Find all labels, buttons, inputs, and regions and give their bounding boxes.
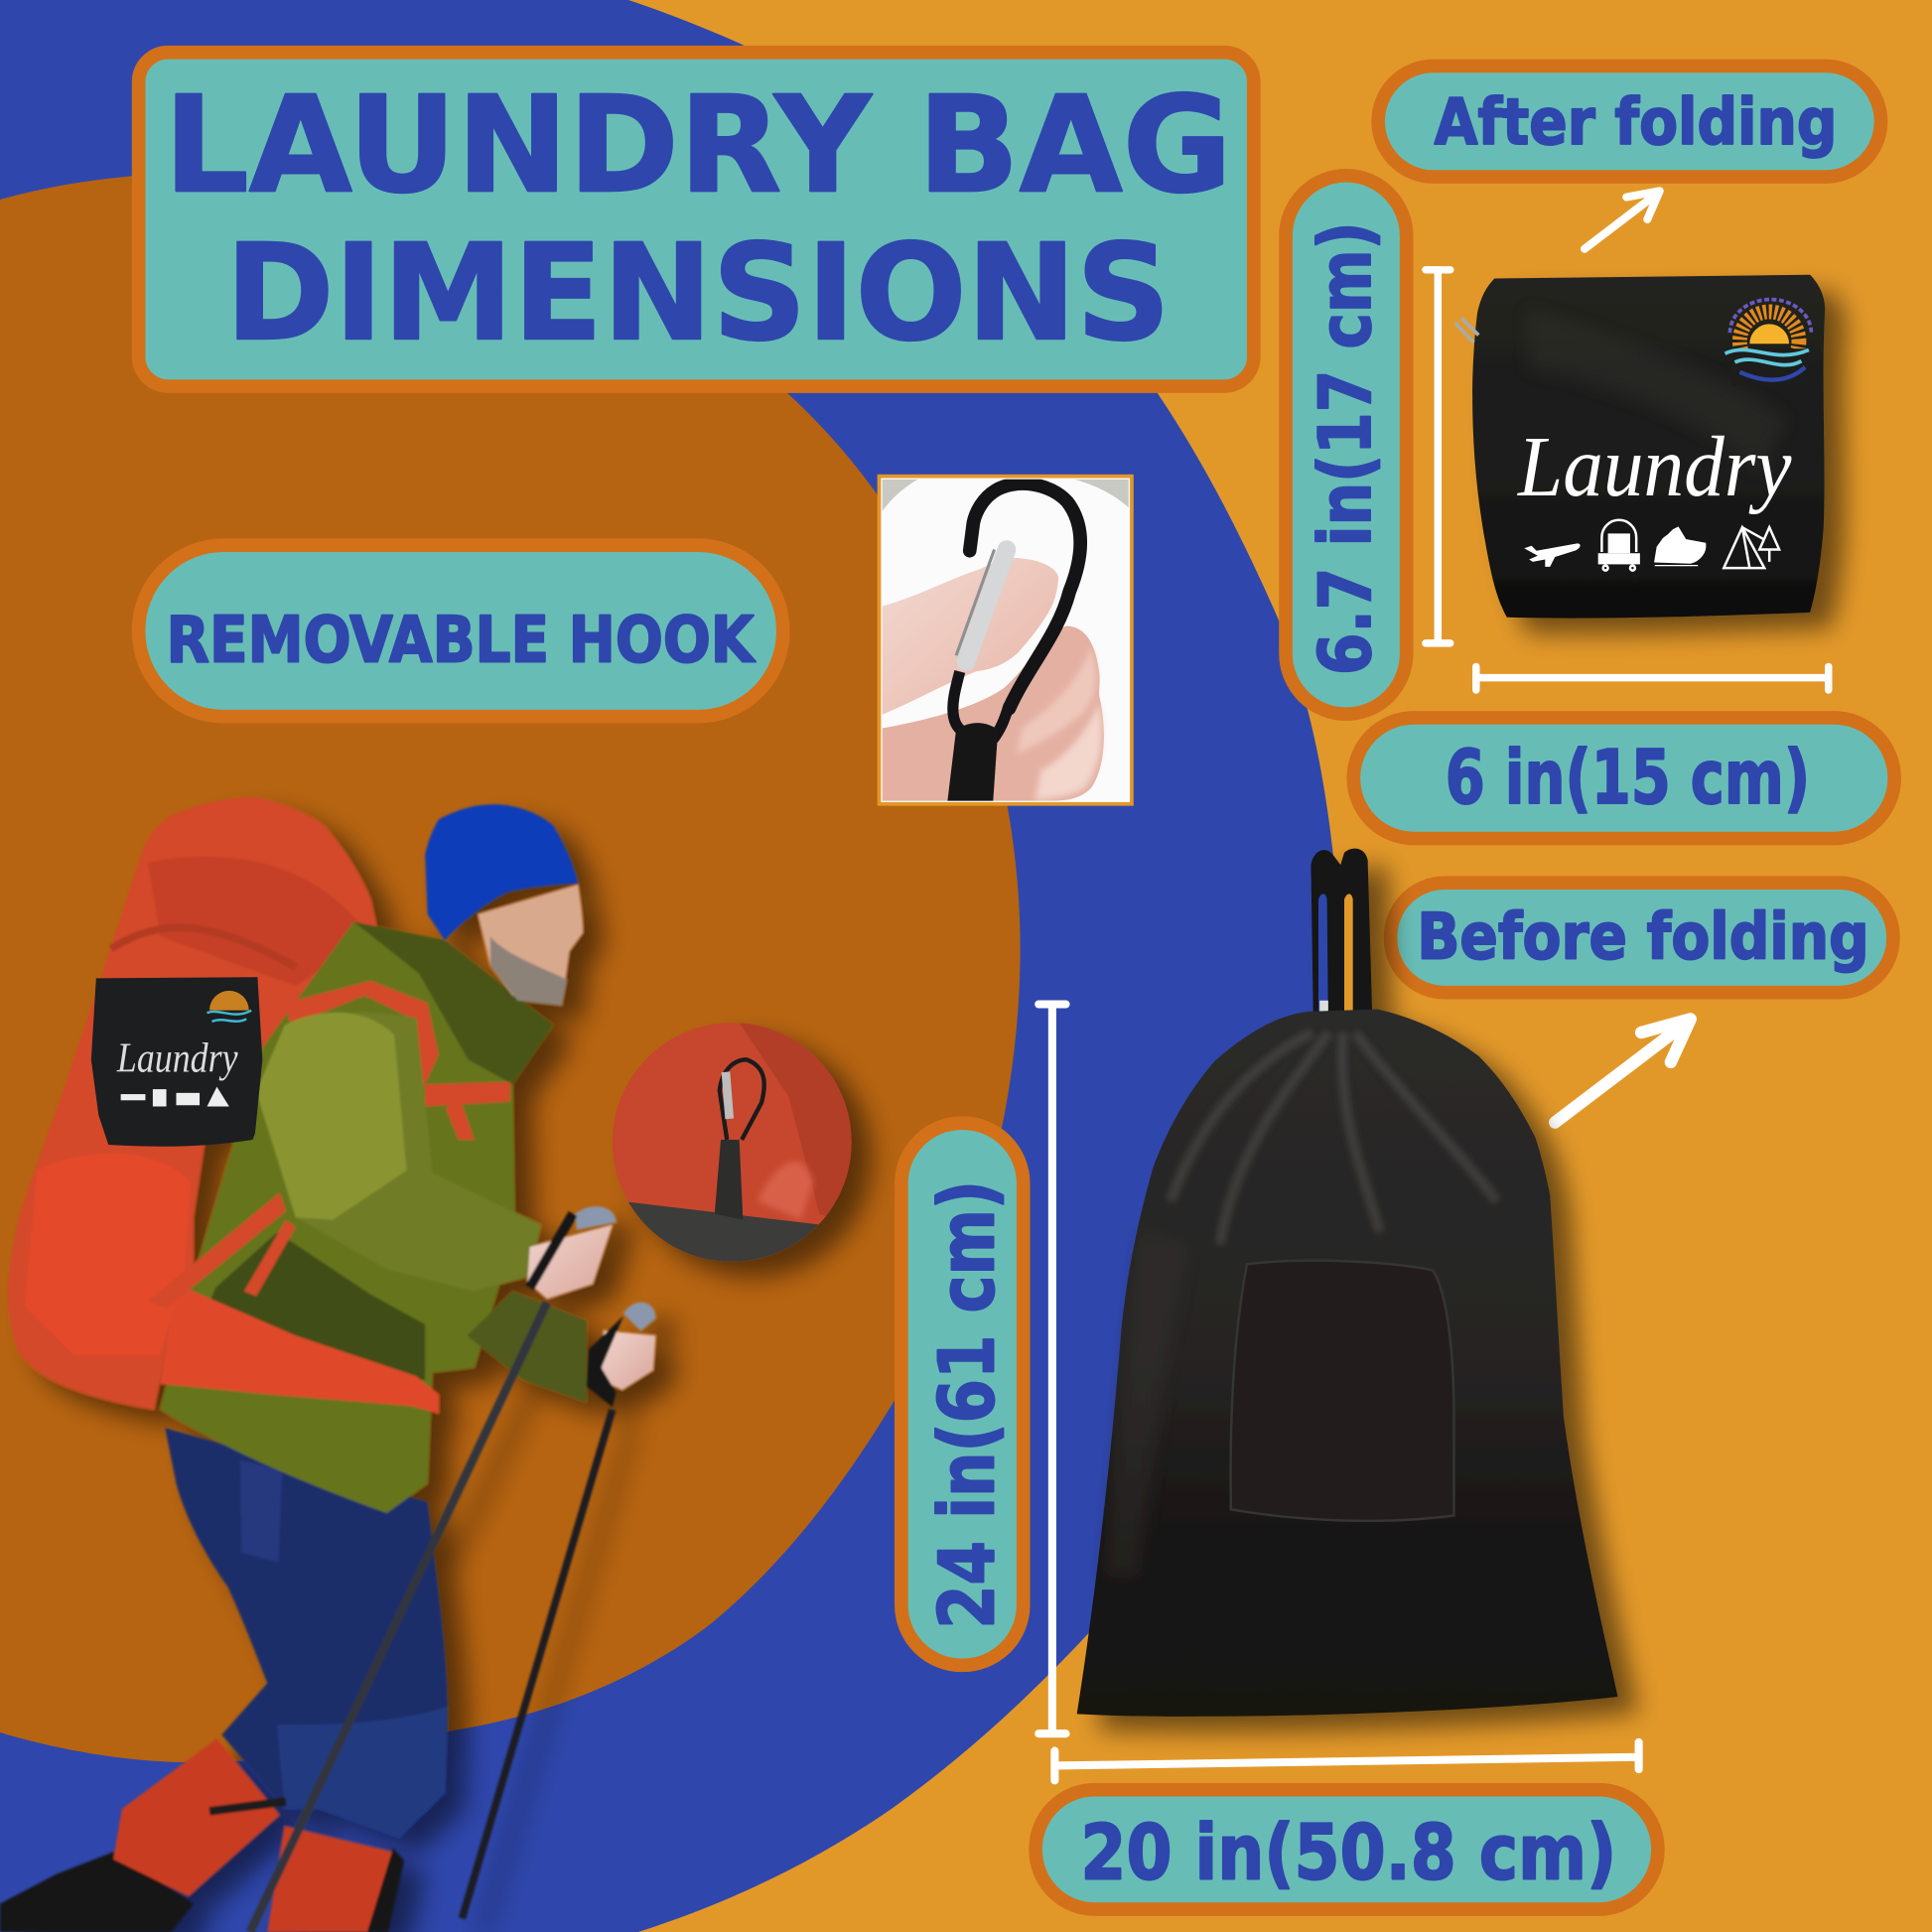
label: bag width: 20 in(50.8 cm) [1080, 1810, 1616, 1898]
label: folded height [1286, 176, 1407, 714]
script wordmark: Laundry [1516, 419, 1792, 514]
trousers [165, 1428, 448, 1837]
icon: tent and tree [1724, 527, 1779, 568]
title text: DIMENSIONS [225, 215, 1171, 370]
beard [490, 936, 567, 1006]
title panel [139, 53, 1254, 386]
loop slots [1318, 894, 1353, 1031]
jacket torso [160, 921, 553, 1513]
label: folded width: 6 in(15 cm) [1446, 735, 1810, 821]
upper hand on grip [527, 1225, 613, 1299]
drawstring loops [1311, 849, 1373, 1029]
label: bag height [901, 1123, 1024, 1665]
brand logo [1725, 300, 1811, 385]
rear gaiter [267, 1826, 393, 1932]
backpack [8, 797, 387, 1410]
gathered fabric highlights [1171, 1033, 1497, 1244]
product: folded laundry pouch [1455, 275, 1825, 619]
background: blue circle [0, 0, 1340, 1932]
label: bag width [1035, 1790, 1658, 1909]
front gaiter [113, 1738, 280, 1896]
shoulder strap [285, 981, 439, 1121]
pouch icons [121, 1087, 229, 1106]
hook body [970, 483, 1080, 709]
near arm sleeve [256, 1013, 541, 1292]
label: after folding: After folding [1435, 85, 1837, 160]
product: unfolded laundry bag [1077, 849, 1618, 1717]
dimension line: bag height [1038, 1004, 1066, 1733]
icon: airplane [1524, 543, 1581, 567]
thumb finger [883, 558, 1058, 715]
dimension line: folded width [1476, 666, 1829, 690]
label: folded width [1353, 718, 1894, 839]
boot [0, 1852, 194, 1932]
hip belt [160, 1284, 439, 1414]
label: bag height: 24 in(61 cm) [923, 1180, 1012, 1629]
dimension line: folded height [1426, 270, 1450, 643]
lower hand on grip [602, 1330, 655, 1390]
label: before folding [1391, 883, 1893, 993]
icon: cruise ship [1655, 527, 1706, 566]
side sheen [1103, 1232, 1189, 1578]
rear boot edge [367, 1849, 404, 1932]
label: folded height: 6.7 in(17 cm) [1304, 221, 1387, 675]
zipper pull [1455, 318, 1478, 343]
photo: carabiner hook held in fingers [880, 477, 1132, 804]
illustration: hiker with backpack and poles [0, 797, 655, 1932]
laundry pouch clipped to backpack [91, 977, 262, 1147]
label: removable hook: REMOVABLE HOOK [167, 603, 756, 677]
label: before folding: Before folding [1417, 900, 1869, 975]
dimension line: bag width [1054, 1742, 1639, 1780]
rear trekking pole [462, 1410, 613, 1918]
arrow: before folding [1555, 1019, 1691, 1123]
far arm sleeve [467, 1292, 587, 1402]
front trekking pole [250, 1303, 547, 1932]
label: removable hook [139, 545, 783, 717]
arrow: after folding [1585, 191, 1660, 249]
webbing strap [947, 723, 998, 801]
bag body [1077, 1009, 1618, 1717]
label: after folding [1378, 66, 1880, 177]
pouch wordmark: Laundry [116, 1035, 238, 1082]
palm and lower fingers [883, 625, 1104, 801]
silver gate [966, 550, 1007, 661]
background: dark orange circle [0, 173, 1021, 1762]
front pocket [1231, 1261, 1453, 1521]
wool hat [425, 804, 578, 940]
hiker silhouette group [0, 797, 655, 1932]
pouch logo [209, 991, 249, 1011]
face and neck [479, 885, 583, 1003]
inset: hook attached to backpack [613, 1023, 863, 1269]
icon: luggage cart [1599, 520, 1639, 571]
title text: LAUNDRY BAG [164, 68, 1232, 222]
